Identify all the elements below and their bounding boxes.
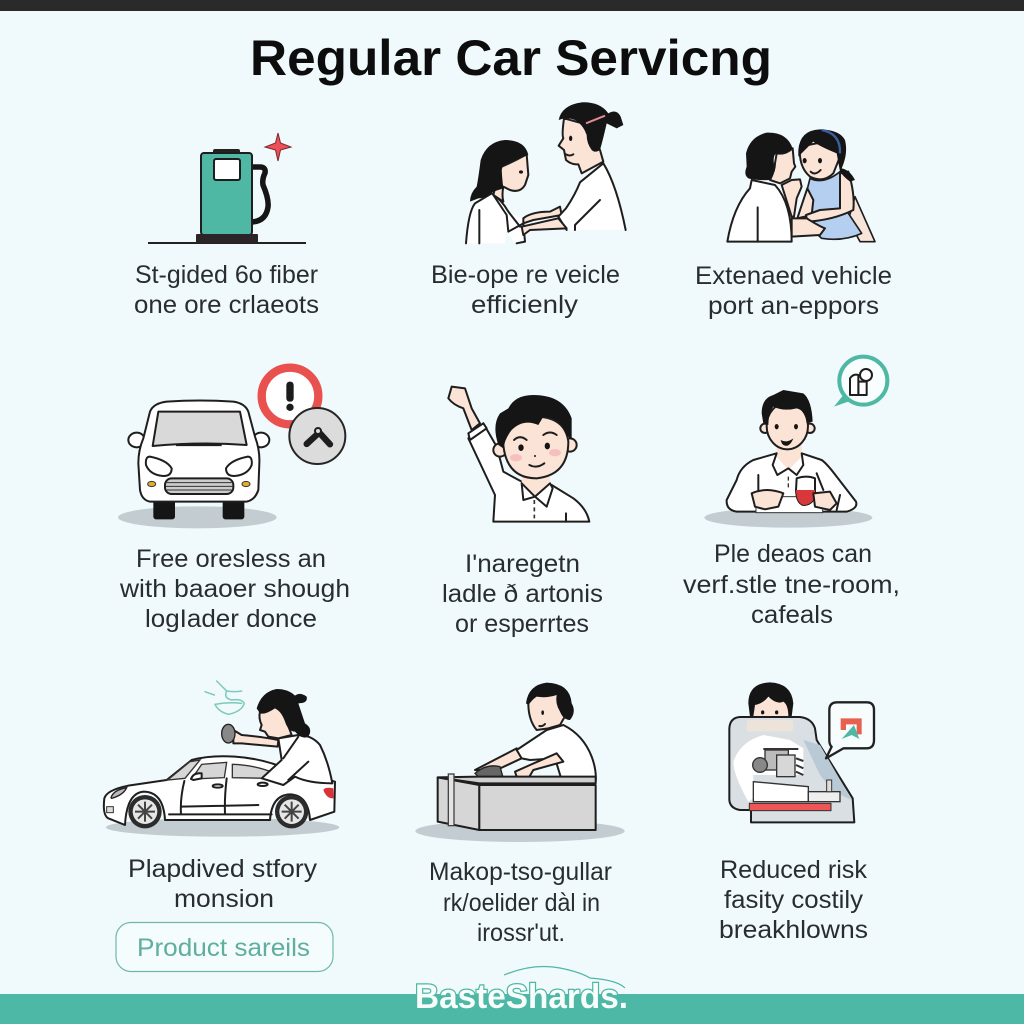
text: panel 9 caption bbox=[719, 856, 868, 944]
text: panel 3 caption bbox=[695, 262, 892, 320]
illustration: person leaning over box bbox=[475, 683, 596, 782]
panel: waving boy bbox=[442, 387, 603, 638]
text: panel 8 caption bbox=[429, 858, 612, 947]
top bar bbox=[0, 0, 1024, 11]
icon: warning circle bbox=[262, 368, 318, 424]
panel: person at box bbox=[415, 683, 625, 947]
text: panel 9 caption: breakhlowns bbox=[719, 916, 868, 944]
text: panel 2 caption: efficienly bbox=[471, 291, 579, 319]
button: product sareils bbox=[116, 922, 333, 972]
text: panel 8 caption: irossr'ut. bbox=[477, 919, 565, 947]
text: panel 5 caption bbox=[442, 550, 603, 638]
text: panel 3 caption: Extenaed vehicle bbox=[695, 262, 892, 290]
text: panel 9 caption: Reduced risk bbox=[720, 856, 868, 884]
text: panel 3 caption: port an-eppors bbox=[708, 292, 879, 320]
text: panel 4 caption: logIader donce bbox=[145, 605, 317, 633]
footer band bbox=[0, 994, 1024, 1024]
panel: car warning bbox=[118, 368, 350, 633]
text: panel 8 caption: Makop-tso-gullar bbox=[429, 858, 612, 886]
illustration: person from behind bbox=[727, 133, 825, 242]
text: panel 5 caption: ladle ð artonis bbox=[442, 580, 603, 608]
panel: reduced risk bbox=[719, 682, 874, 944]
title: Regular Car Servicng bbox=[250, 30, 772, 86]
illustration: standing man bbox=[522, 102, 626, 235]
button: product sareils: Product sareils bbox=[137, 934, 310, 962]
icon: red spark bbox=[265, 133, 291, 161]
panel: person at table bbox=[683, 357, 900, 629]
text: panel 7 caption: Plapdived stfory bbox=[128, 855, 318, 883]
illustration: waving boy bbox=[448, 387, 589, 522]
illustration: person behind engine machine bbox=[729, 682, 854, 822]
text: panel 2 caption: Bie-ope re veicle bbox=[431, 261, 620, 289]
panel: two people efficiency bbox=[431, 102, 626, 319]
panel: side view car bbox=[104, 681, 339, 972]
icon: teal swirl bbox=[205, 681, 244, 714]
panel: extended vehicle bbox=[695, 129, 892, 320]
text: panel 6 caption: cafeals bbox=[751, 601, 833, 629]
icon: bubble with logo bbox=[826, 702, 874, 758]
text: panel 7 caption: monsion bbox=[174, 885, 274, 913]
illustration: girl in blue bbox=[797, 129, 875, 242]
icon: fuel pump bbox=[148, 149, 306, 243]
text: panel 2 caption bbox=[431, 261, 620, 319]
text: panel 8 caption: rk/oelider dàl in bbox=[443, 889, 600, 917]
illustration: car with woman bbox=[104, 689, 339, 837]
text: panel 9 caption: fasity costily bbox=[724, 886, 864, 914]
text: panel 4 caption: with baaoer shough bbox=[119, 575, 350, 603]
icon: tool circle bbox=[289, 408, 345, 464]
illustration: seated woman bbox=[466, 140, 528, 243]
icon: speech bubble bbox=[834, 357, 887, 407]
panel: fuel pump bbox=[134, 133, 319, 319]
illustration: grey box bbox=[415, 774, 625, 842]
text: panel 6 caption: verf.stle tne-room, bbox=[683, 571, 900, 599]
text: panel 5 caption: or esperrtes bbox=[455, 610, 589, 638]
illustration: front view car bbox=[118, 400, 277, 528]
text: panel 5 caption: I'naregetn bbox=[465, 550, 580, 578]
logo: car outline and brand: BasteShards. bbox=[415, 978, 628, 1016]
text: panel 4 caption: Free oresless an bbox=[136, 545, 326, 573]
text: panel 7 caption bbox=[128, 855, 318, 913]
text: panel 4 caption bbox=[119, 545, 350, 633]
text: panel 1 caption: one ore crlaeots bbox=[134, 291, 319, 319]
text: panel 6 caption: Ple deaos can bbox=[714, 540, 872, 568]
text: panel 1 caption bbox=[134, 261, 319, 319]
text: panel 6 caption bbox=[683, 540, 900, 629]
text: panel 1 caption: St-gided 6o fiber bbox=[135, 261, 318, 289]
illustration: person with drink bbox=[704, 390, 872, 528]
